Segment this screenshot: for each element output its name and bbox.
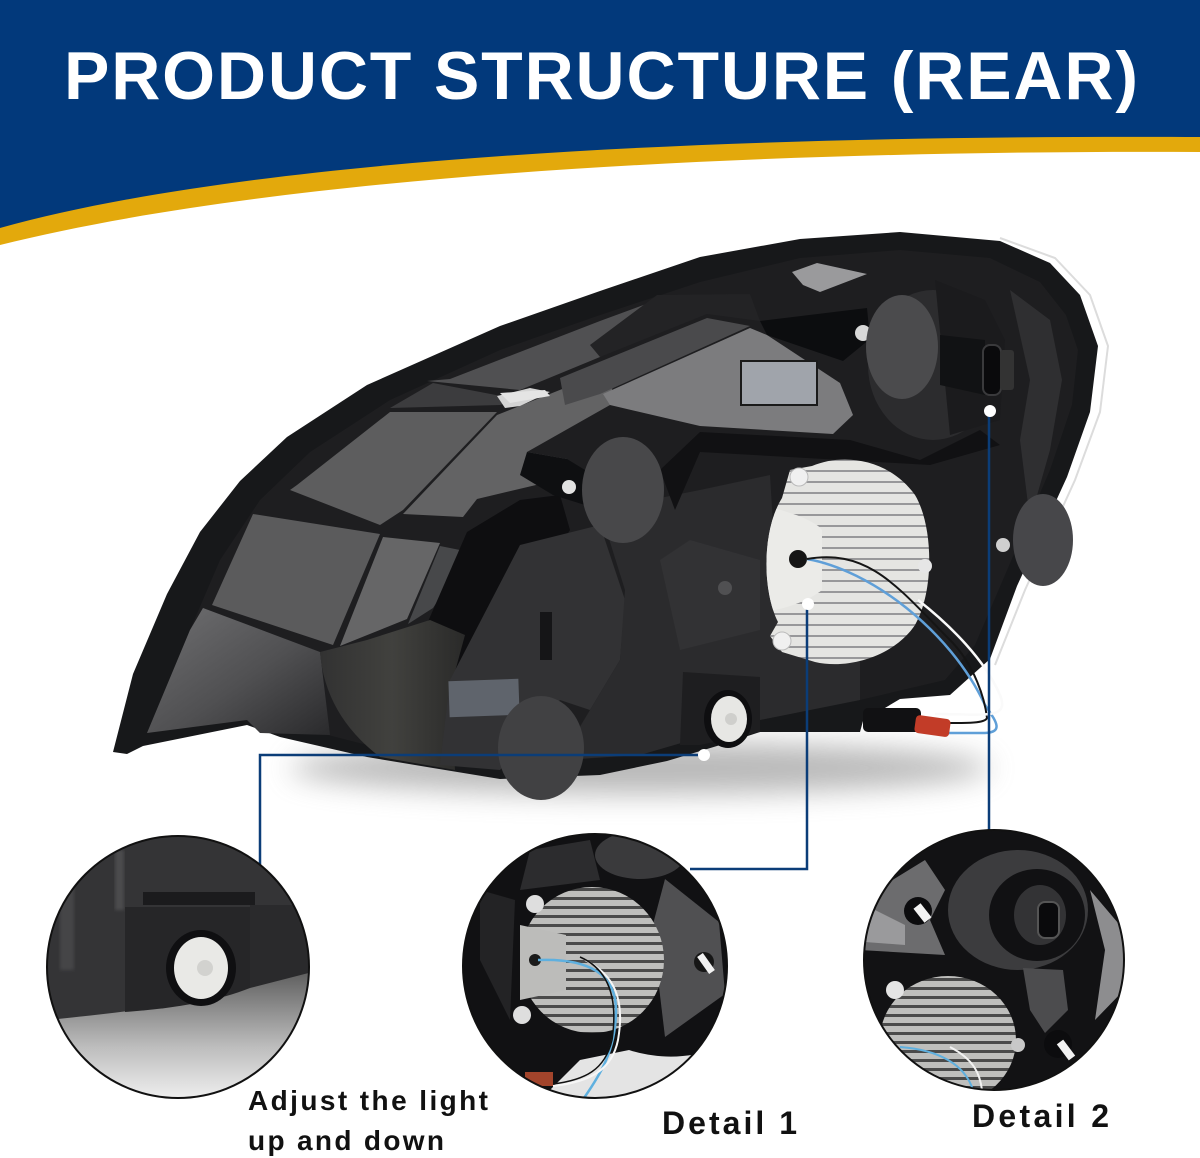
adjuster	[704, 690, 752, 748]
detail 2 outline	[864, 830, 1124, 1090]
detail circle: detail 2	[865, 831, 1123, 1089]
title: PRODUCT STRUCTURE (REAR)	[64, 38, 1138, 114]
dark band	[660, 430, 1000, 510]
upper panels	[290, 412, 497, 525]
socket disc	[868, 290, 998, 440]
detail circle: detail 1	[460, 830, 730, 1100]
caption: detail 2: Detail 2	[972, 1098, 1109, 1134]
header banner	[0, 0, 1200, 245]
small screws	[996, 538, 1010, 552]
grey label	[741, 361, 817, 405]
callout lines	[260, 411, 989, 869]
lower body	[560, 475, 860, 760]
dark void	[420, 495, 570, 680]
wires	[807, 559, 997, 733]
rubber caps	[866, 295, 938, 399]
dark flap	[408, 546, 470, 624]
cylinder	[320, 620, 465, 770]
reflector housing	[440, 525, 625, 770]
dark wedge	[590, 294, 760, 357]
lower left panel	[147, 608, 330, 735]
detail circle: adjuster	[48, 837, 308, 1097]
left connector	[520, 452, 585, 505]
plug	[863, 708, 921, 732]
frame	[113, 232, 1098, 779]
detail 1 outline	[463, 834, 727, 1098]
detail circle outline	[47, 836, 309, 1098]
caption: adjuster: up and down	[248, 1125, 444, 1156]
upper triangle plate	[603, 328, 853, 434]
connector	[760, 308, 870, 361]
top highlight	[792, 263, 867, 292]
large left panel	[212, 514, 380, 645]
caption: detail 1: Detail 1	[662, 1105, 797, 1141]
inner base	[147, 250, 1078, 765]
slot	[540, 612, 552, 660]
heat sink	[766, 460, 930, 664]
caption: adjuster	[248, 1085, 488, 1156]
headlight rear view	[113, 232, 1108, 800]
callout dots	[698, 405, 996, 761]
silver tag	[497, 388, 550, 408]
floor shadow	[290, 742, 990, 794]
side panel	[340, 537, 440, 646]
caption: adjuster: Adjust the light	[248, 1085, 488, 1116]
lens edge	[995, 238, 1108, 665]
